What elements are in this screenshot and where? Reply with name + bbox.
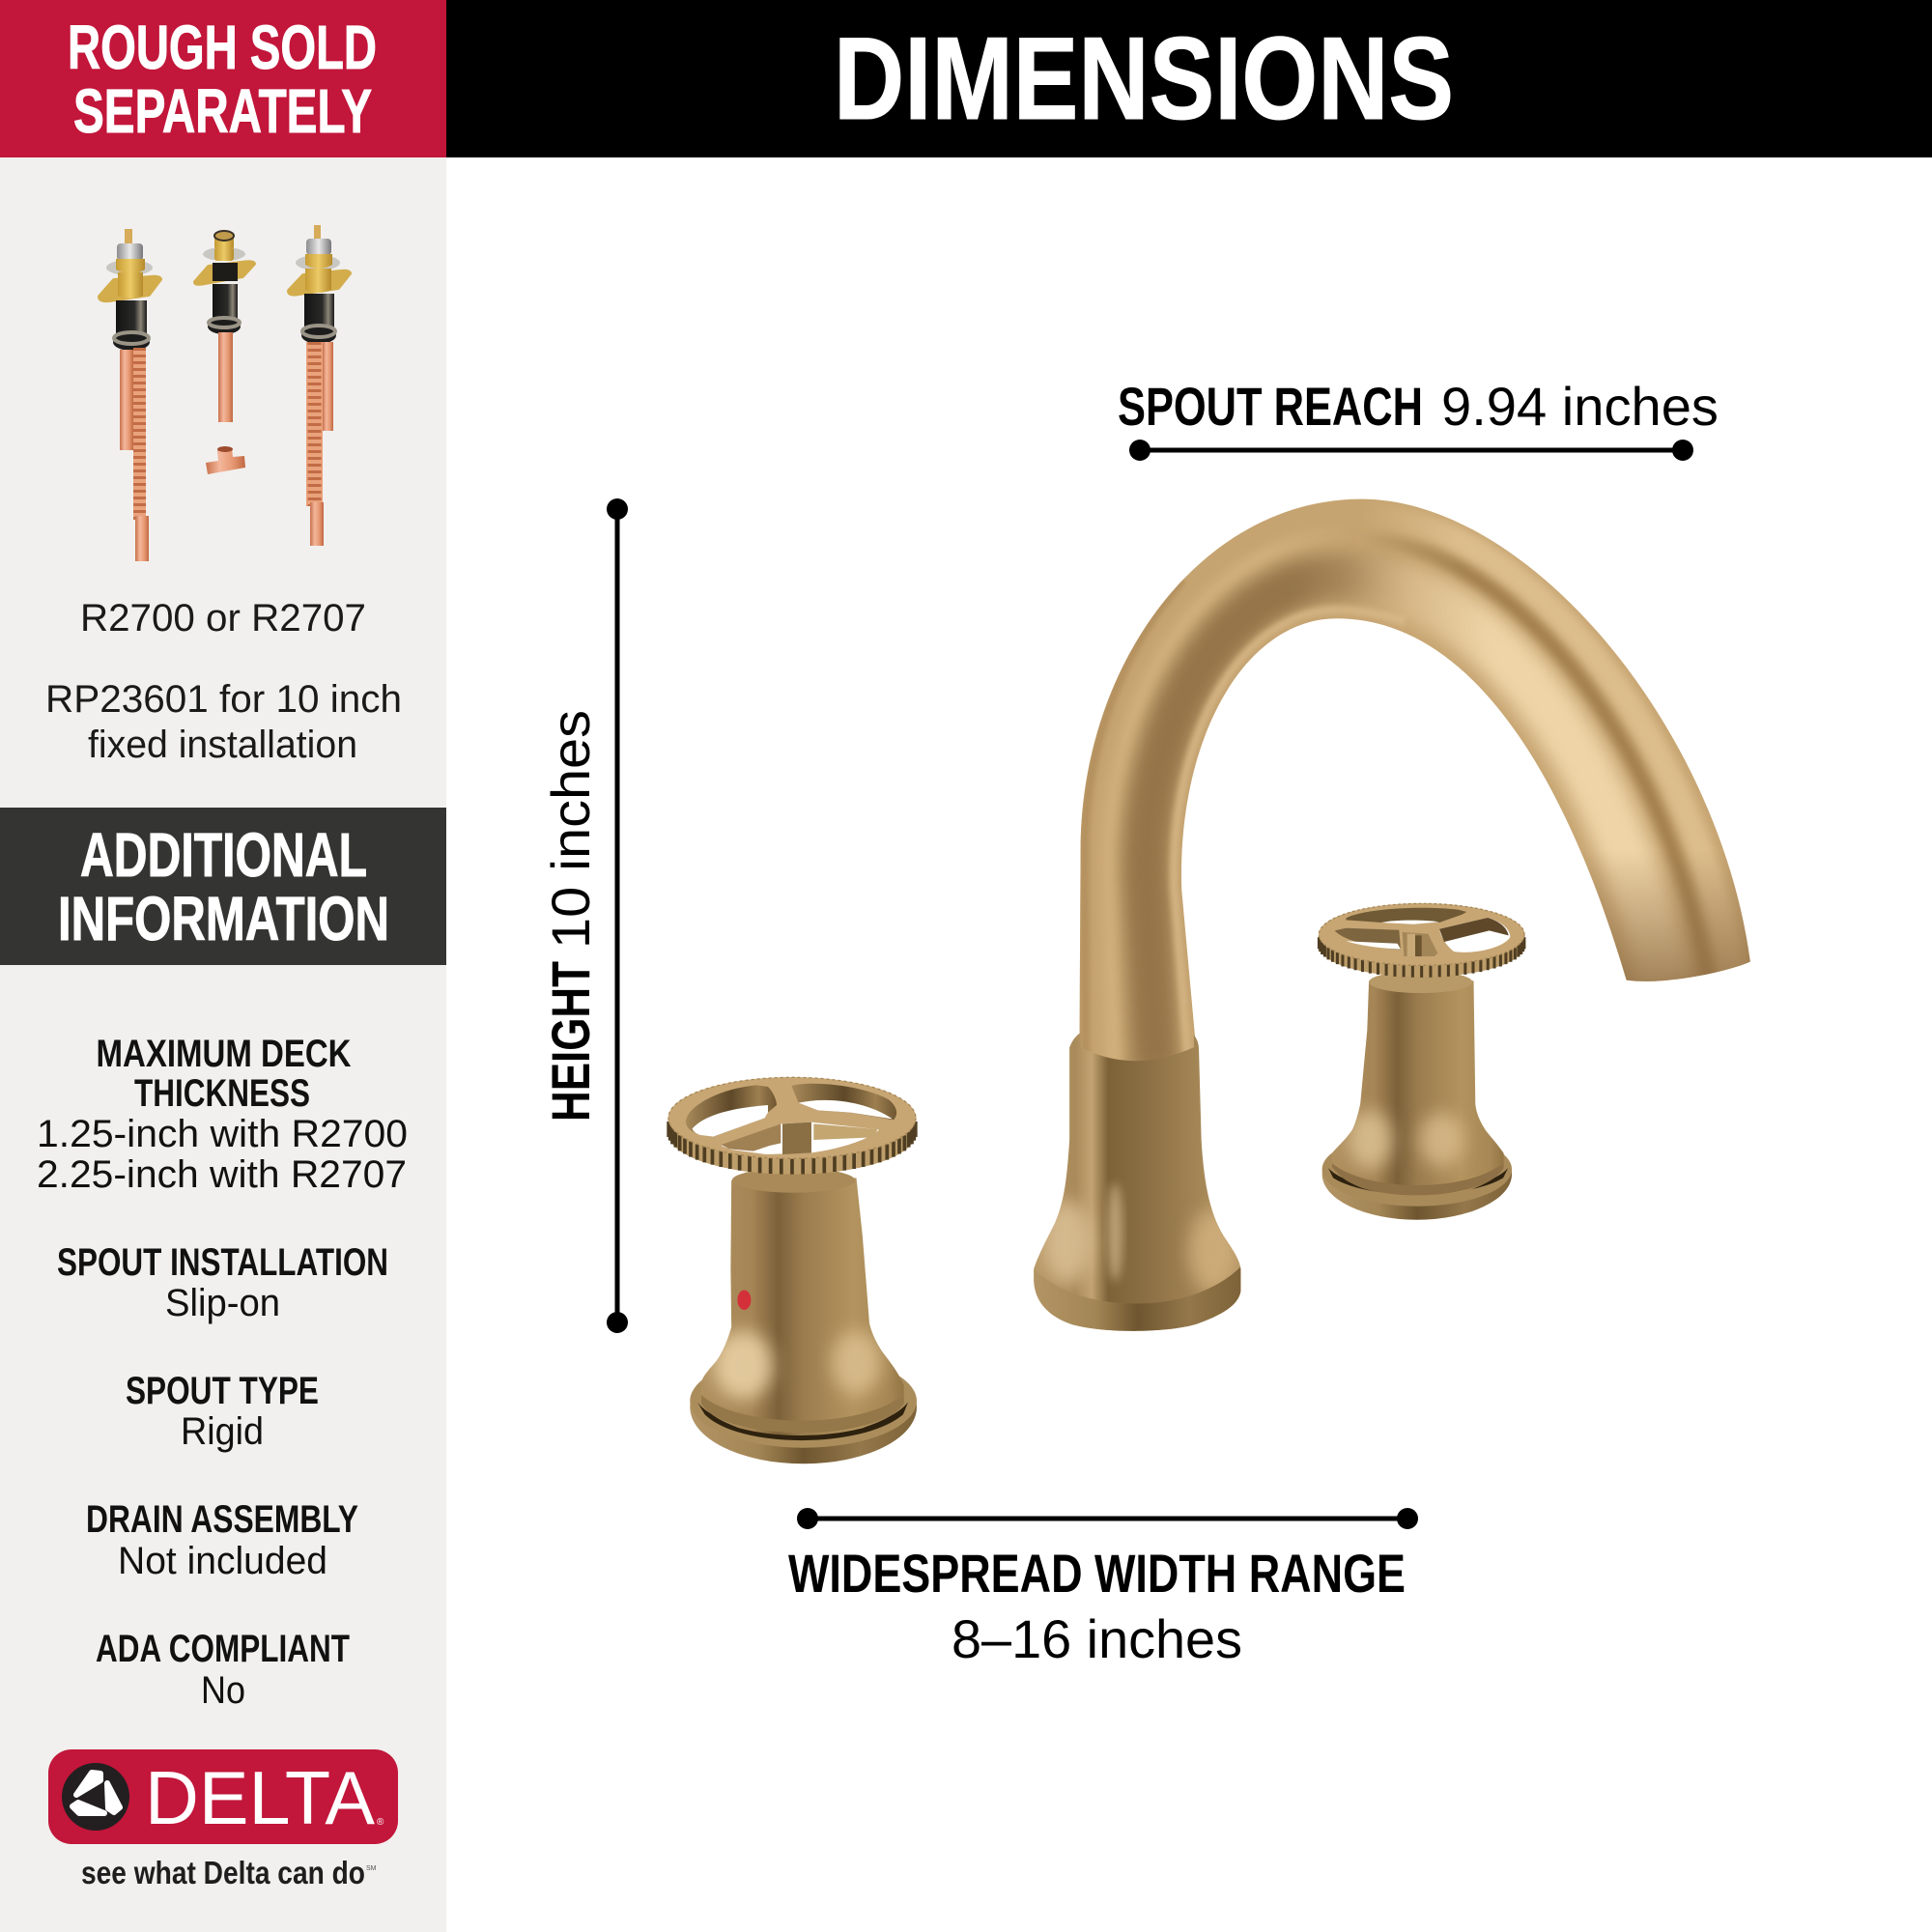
spec: spout installation: SPOUT INSTALLATION [57, 1241, 388, 1284]
wheel openings [686, 1085, 777, 1137]
dimension: widespread width range [788, 1508, 1418, 1669]
icon: red hot indicator [737, 1290, 751, 1310]
spec: spout installation [57, 1241, 388, 1324]
spec: ada compliant: ADA COMPLIANT [96, 1628, 350, 1670]
spec: maximum deck thickness: MAXIMUM DECK [97, 1033, 352, 1075]
spec: ada compliant: No [201, 1669, 245, 1712]
wheel [668, 1077, 916, 1175]
title banner: dimensions [446, 0, 1932, 157]
delta logo [48, 1749, 398, 1890]
delta logo: DELTA [145, 1755, 375, 1840]
rough part numbers text: R2700 or R2707 [80, 597, 366, 639]
spec: spout type: Rigid [181, 1410, 264, 1453]
panel: left sidebar [0, 157, 446, 1932]
wheel openings [1346, 908, 1466, 923]
spec: maximum deck thickness [37, 1033, 408, 1196]
dimension: widespread width range: WIDESPREAD WIDTH RANGE [788, 1543, 1406, 1604]
rough-in valve parts photo [99, 225, 350, 561]
dimension: spout reach [1118, 376, 1719, 461]
right handle [1319, 903, 1524, 1220]
spec: maximum deck thickness: 1.25-inch with R2700 [37, 1113, 408, 1155]
spec: drain assembly: Not included [118, 1540, 327, 1582]
arrow: width line [797, 1508, 1418, 1529]
arrow: height line [607, 498, 628, 1333]
delta logo: ® [377, 1817, 384, 1828]
banner: rough sold separately: ROUGH SOLD [68, 13, 377, 82]
spec list [37, 1033, 408, 1712]
spec: spout installation: Slip-on [165, 1282, 280, 1324]
dimension: spout reach: SPOUT REACH [1118, 376, 1423, 437]
dimension: height: 10 inches [540, 710, 601, 949]
spout tube [1079, 499, 1762, 1072]
middle valve [195, 231, 254, 422]
delta logo: see what Delta can do [81, 1855, 365, 1890]
spec: maximum deck thickness: 2.25-inch with R2707 [37, 1153, 407, 1196]
title banner: dimensions: DIMENSIONS [834, 13, 1454, 144]
banner: rough sold separately: SEPARATELY [73, 76, 372, 146]
dimension: spout reach: 9.94 inches [1441, 376, 1719, 437]
rough part numbers text [45, 597, 402, 766]
right valve [289, 225, 350, 546]
dimension: height: HEIGHT [540, 961, 601, 1122]
heading band: additional information: ADDITIONAL [80, 820, 367, 890]
delta logo: SM [366, 1865, 377, 1872]
wheel [1319, 903, 1524, 978]
arrow: spout reach line [1129, 440, 1693, 461]
spec: spout type: SPOUT TYPE [126, 1370, 319, 1412]
rough part numbers text: fixed installation [88, 724, 357, 766]
heading band: additional information [0, 808, 446, 965]
spec: ada compliant [96, 1628, 350, 1712]
left valve [99, 229, 160, 561]
faucet illustration [668, 499, 1762, 1463]
icon: delta emblem [62, 1763, 129, 1831]
left handle [668, 1077, 917, 1463]
spec: drain assembly: DRAIN ASSEMBLY [86, 1498, 358, 1541]
spec: drain assembly [86, 1498, 358, 1582]
T fitting [206, 446, 245, 474]
banner: rough sold separately [0, 0, 446, 157]
spec: spout type [126, 1370, 319, 1453]
rough part numbers text: RP23601 for 10 inch [45, 678, 402, 721]
spec: maximum deck thickness: THICKNESS [134, 1072, 310, 1115]
heading band: additional information: INFORMATION [58, 884, 389, 953]
dimension: widespread width range: 8–16 inches [952, 1608, 1242, 1669]
spout base [1034, 1033, 1240, 1331]
dimension: height [540, 498, 628, 1333]
